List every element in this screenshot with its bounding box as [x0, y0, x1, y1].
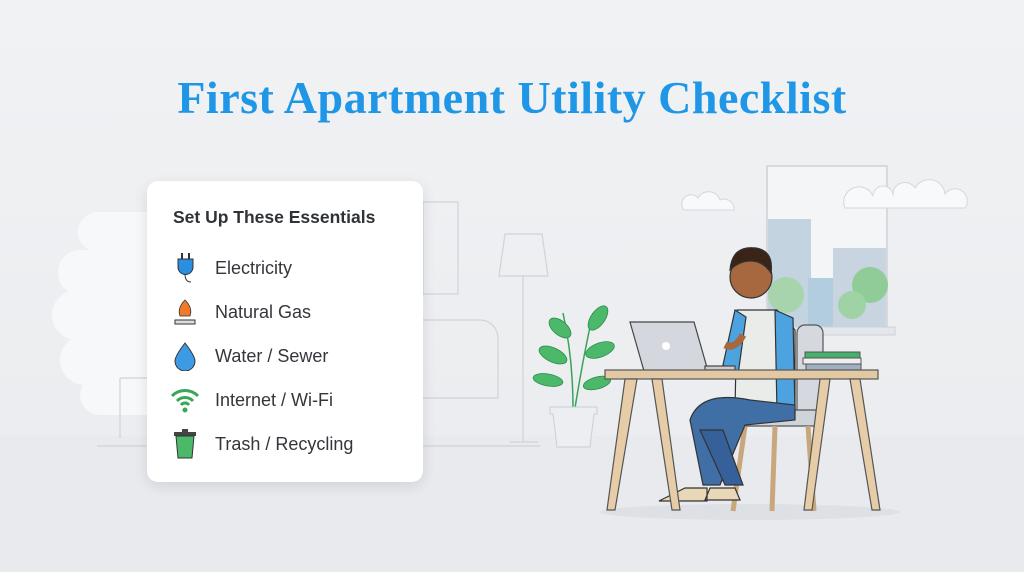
item: electricity — [178, 253, 292, 282]
heading: Set Up These Essentials — [173, 207, 375, 227]
icon: clouds — [682, 180, 967, 210]
faint furniture — [97, 202, 548, 446]
person — [659, 248, 795, 501]
laptop — [630, 322, 735, 371]
icon: window with city — [762, 166, 895, 335]
icon: plant — [532, 303, 616, 447]
chair — [733, 325, 823, 511]
item: natural gas — [174, 300, 311, 324]
desk — [605, 370, 880, 510]
books — [803, 352, 861, 370]
item: wifi — [171, 389, 333, 412]
item: wifi: Internet / Wi-Fi — [215, 390, 333, 410]
decorative white blobs — [52, 212, 168, 415]
item: trash — [174, 429, 353, 458]
item: electricity: Electricity — [215, 258, 292, 278]
item: natural gas: Natural Gas — [215, 302, 311, 322]
floor shadow — [600, 504, 900, 520]
item: trash: Trash / Recycling — [215, 434, 353, 454]
item: water: Water / Sewer — [215, 346, 328, 366]
item: water — [174, 342, 328, 371]
title: First Apartment Utility Checklist — [177, 72, 847, 123]
panel: essentials checklist — [147, 181, 423, 482]
